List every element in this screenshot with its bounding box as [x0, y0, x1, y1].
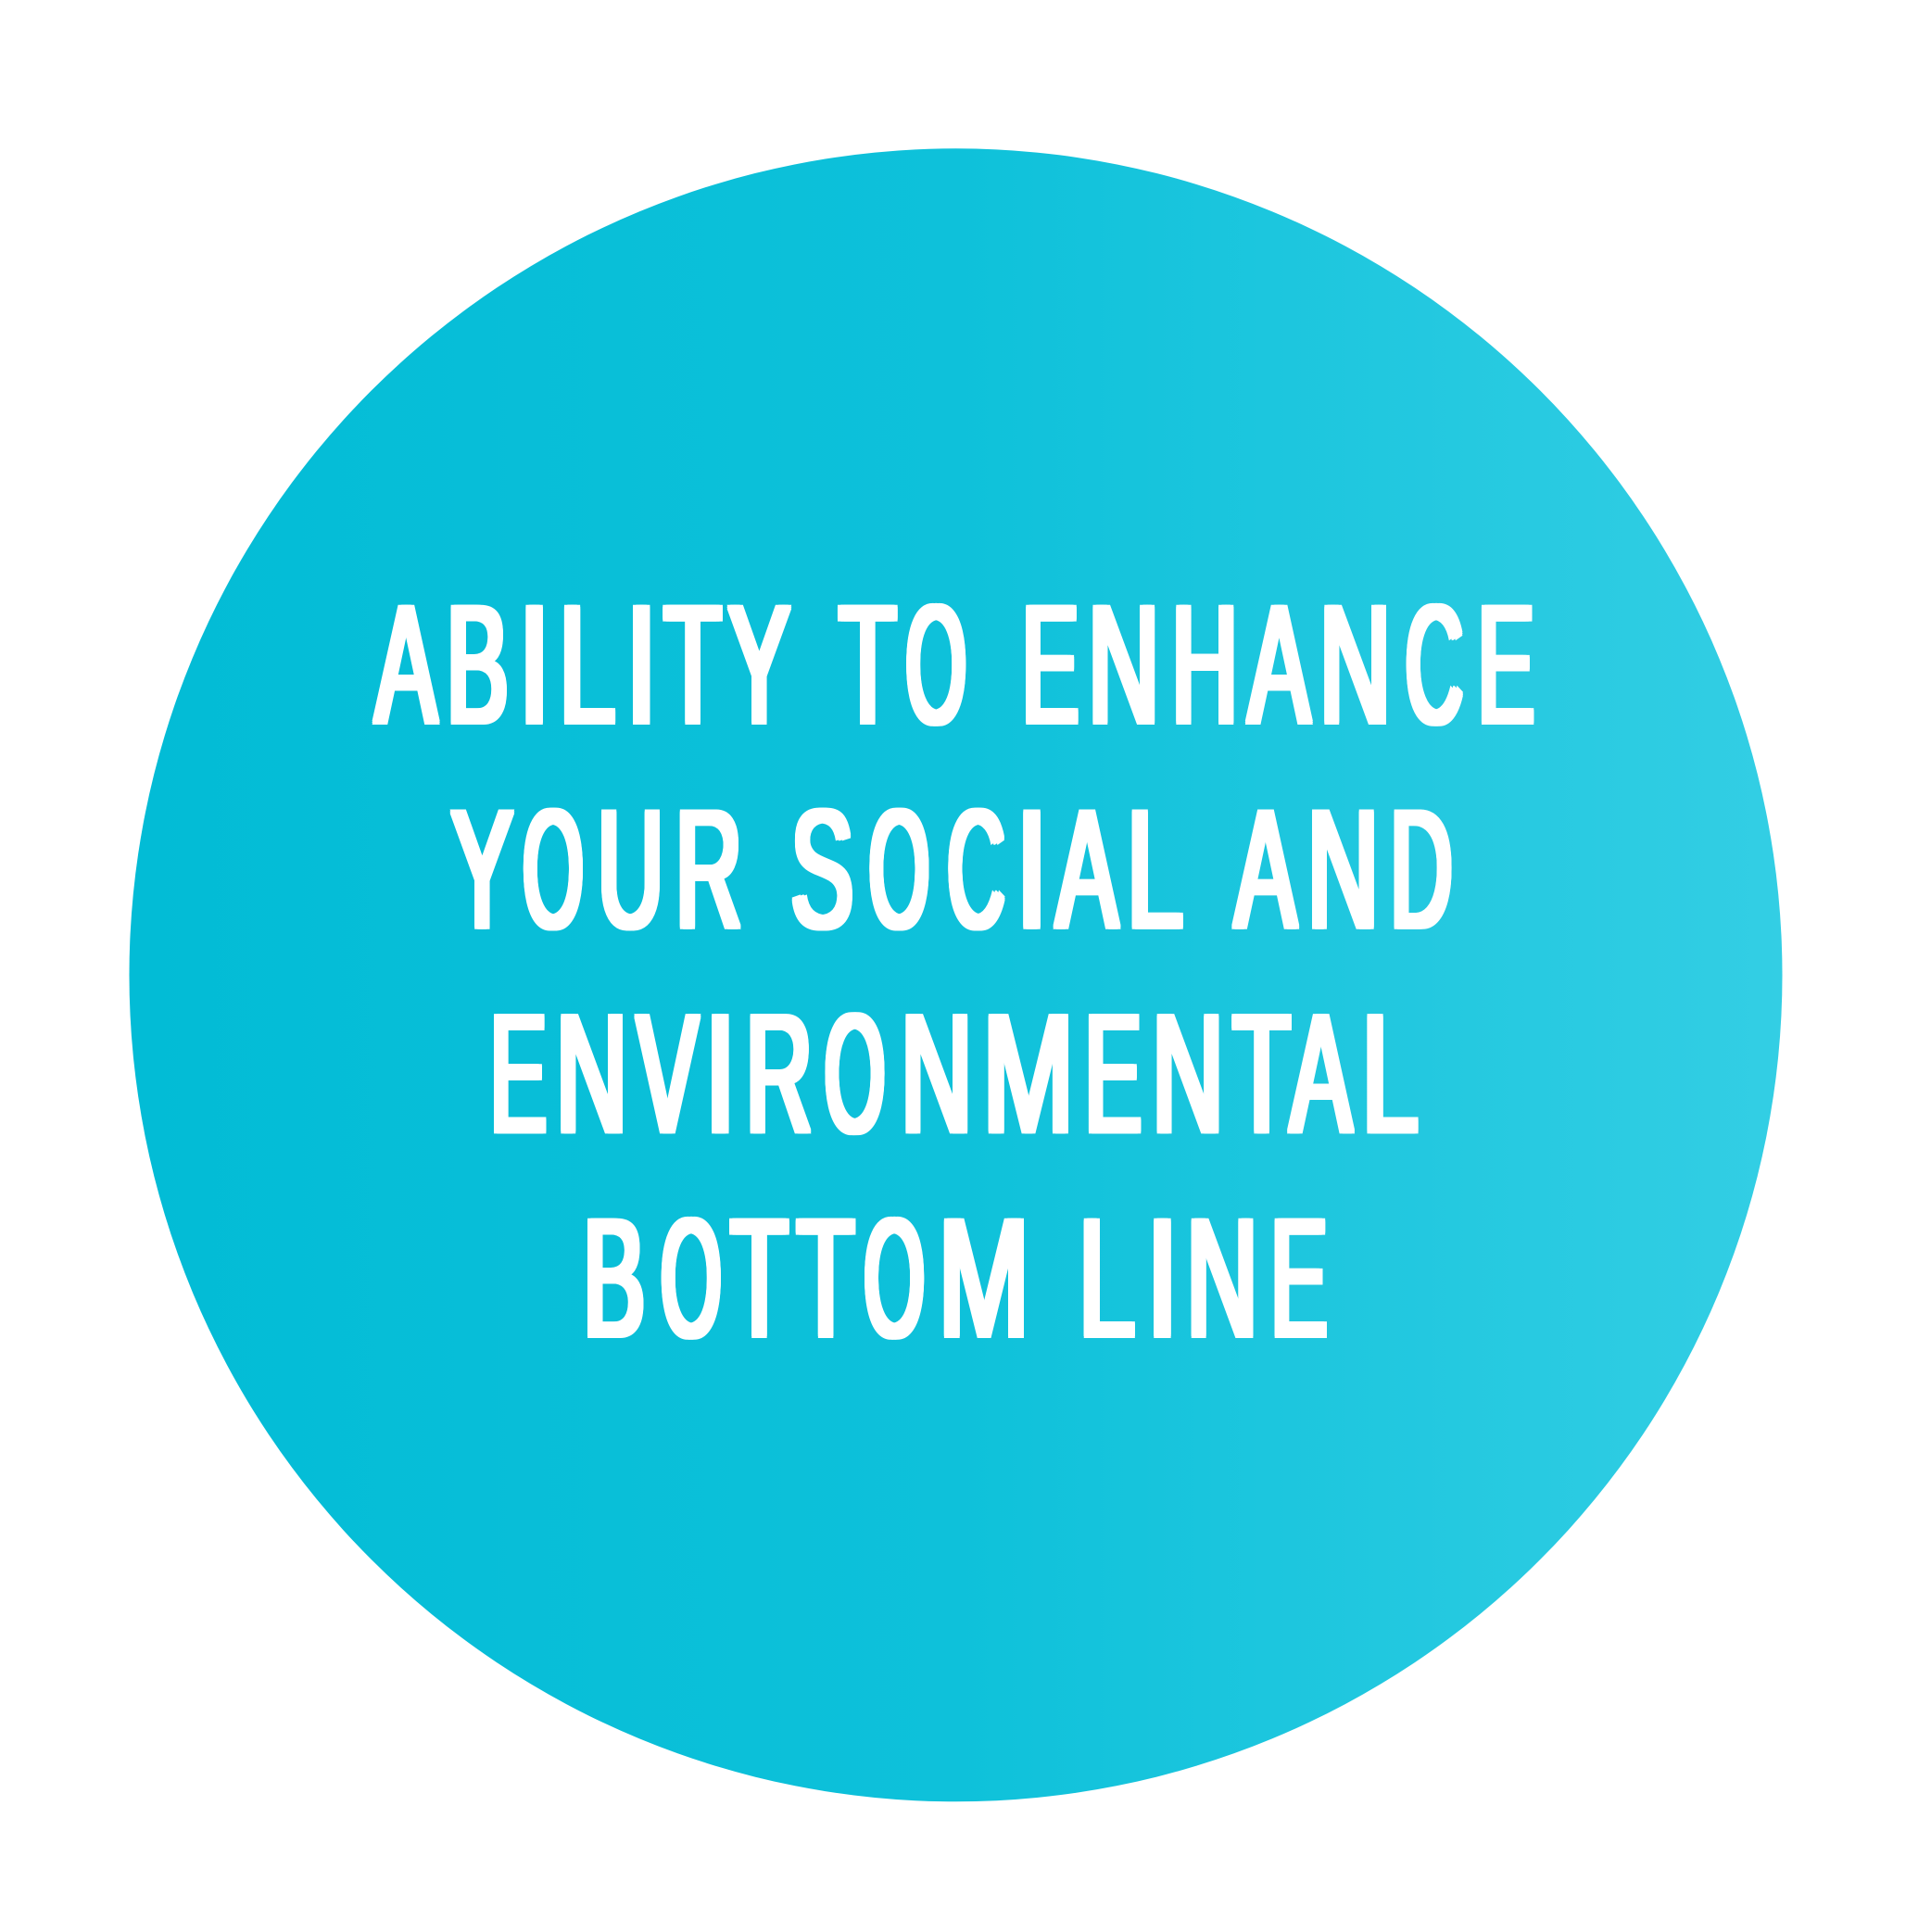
line 1: ability to enhance: N	[1319, 570, 1391, 759]
line 3: environmental	[490, 979, 1418, 1168]
line 2: your social and: L	[1127, 775, 1182, 964]
line 1: ability to enhance: E	[1022, 570, 1079, 759]
line 3: environmental: E	[1084, 979, 1141, 1168]
line 3: environmental: N	[1152, 979, 1223, 1168]
line 4: bottom line: L	[1079, 1183, 1134, 1372]
line 1: ability to enhance: N	[1088, 570, 1159, 759]
line 4: bottom line: B	[583, 1183, 645, 1372]
line 4: bottom line: O	[661, 1183, 721, 1372]
line 2: your social and: I	[1016, 775, 1047, 964]
line 3: environmental: N	[556, 979, 627, 1168]
line 2: your social and: N	[1306, 775, 1378, 964]
line 1: ability to enhance: L	[559, 570, 615, 759]
line 2: your social and: A	[1234, 775, 1296, 964]
line 3: environmental: N	[901, 979, 972, 1168]
line 4: bottom line: T	[730, 1183, 788, 1372]
line 3: environmental: V	[637, 979, 698, 1168]
line 1: ability to enhance: T	[839, 570, 896, 759]
line 2: your social and: A	[1055, 775, 1117, 964]
line 3: environmental: R	[745, 979, 812, 1168]
line 4: bottom line: O	[864, 1183, 924, 1372]
line 2: your social and: U	[597, 775, 663, 964]
statement text	[374, 570, 1533, 1372]
line 4: bottom line	[583, 1183, 1327, 1372]
line 2: your social and	[450, 775, 1452, 964]
line 3: environmental: O	[825, 979, 885, 1168]
line 1: ability to enhance	[374, 570, 1533, 759]
line 1: ability to enhance: A	[374, 570, 436, 759]
line 2: your social and: O	[523, 775, 583, 964]
line 1: ability to enhance: B	[446, 570, 508, 759]
line 2: your social and: R	[675, 775, 741, 964]
line 3: environmental: M	[982, 979, 1074, 1168]
line 3: environmental: I	[704, 979, 736, 1168]
line 2: your social and: C	[947, 775, 1004, 964]
teal gradient circle	[130, 148, 1783, 1801]
line 1: ability to enhance: O	[905, 570, 966, 759]
line 1: ability to enhance: A	[1248, 570, 1309, 759]
line 4: bottom line: M	[938, 1183, 1029, 1372]
line 2: your social and: O	[868, 775, 928, 964]
line 2: your social and: S	[790, 775, 852, 964]
line 3: environmental: T	[1232, 979, 1290, 1168]
line 1: ability to enhance: T	[663, 570, 721, 759]
line 1: ability to enhance: H	[1171, 570, 1237, 759]
line 3: environmental: A	[1290, 979, 1352, 1168]
line 2: your social and: D	[1390, 775, 1452, 964]
line 1: ability to enhance: I	[518, 570, 549, 759]
line 3: environmental: L	[1362, 979, 1418, 1168]
infographic canvas: E	[1477, 570, 1533, 759]
line 3: environmental: E	[490, 979, 546, 1168]
line 1: ability to enhance: C	[1405, 570, 1462, 759]
line 1: ability to enhance: Y	[727, 570, 789, 759]
line 1: ability to enhance: I	[625, 570, 657, 759]
line 4: bottom line: N	[1186, 1183, 1257, 1372]
line 2: your social and: Y	[450, 775, 513, 964]
line 4: bottom line: T	[797, 1183, 854, 1372]
line 4: bottom line: I	[1146, 1183, 1178, 1372]
statement text: E	[1270, 1183, 1327, 1372]
